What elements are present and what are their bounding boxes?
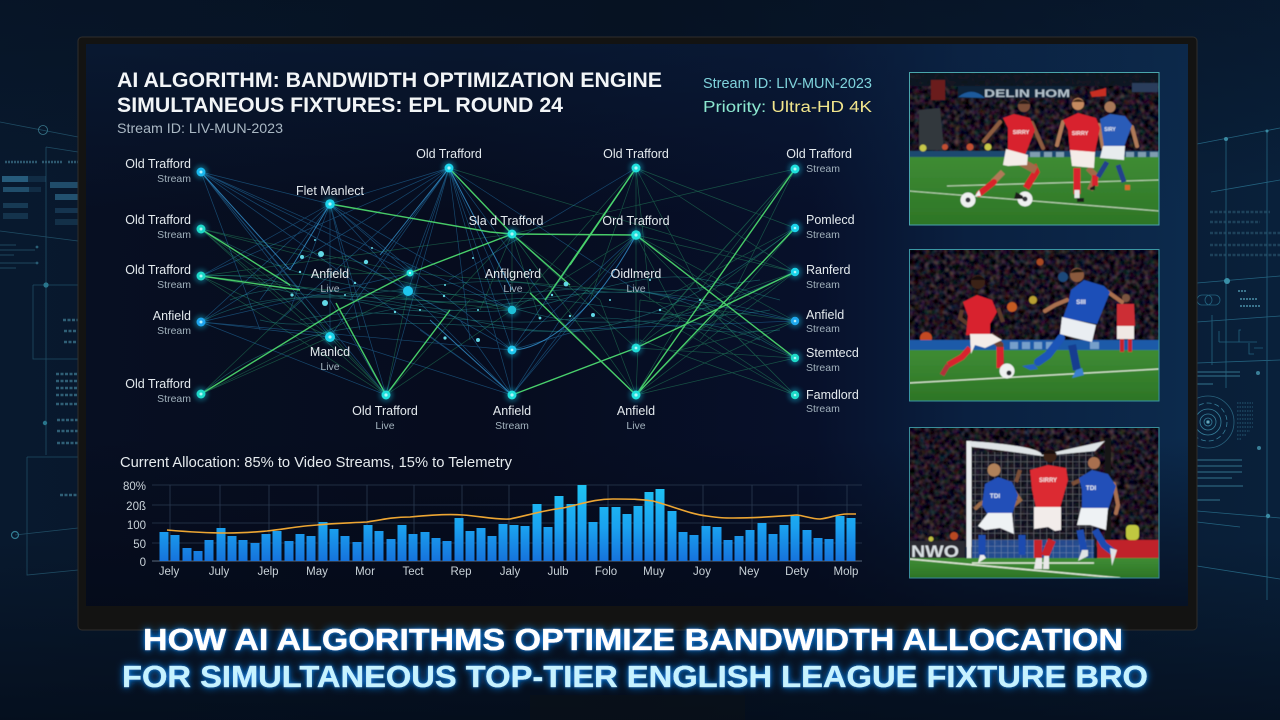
- x axis: Dety: [785, 566, 809, 578]
- x axis: Tect: [402, 566, 424, 578]
- node labels: Stream: [157, 173, 191, 185]
- particles: [290, 239, 701, 342]
- node labels: Stream: [157, 393, 191, 405]
- bars: [160, 485, 856, 561]
- node labels: Old Trafford: [416, 147, 482, 161]
- node labels: Stream: [157, 279, 191, 291]
- player red 1: [993, 172, 1003, 182]
- player blue: [1098, 162, 1107, 177]
- node labels: Live: [320, 283, 340, 295]
- node labels: Old Trafford: [125, 213, 191, 227]
- y axis: [123, 481, 146, 569]
- bottom headline: HOW AI ALGORITHMS OPTIMIZE BANDWIDTH ALLOCATION: [143, 622, 1123, 657]
- node labels: Pomlecd: [806, 213, 855, 227]
- node labels: Stream: [806, 279, 840, 291]
- match photo 3: TDI: [1086, 485, 1096, 492]
- node labels: Old Trafford: [125, 377, 191, 391]
- node labels: [125, 147, 859, 432]
- x axis: Julb: [547, 566, 569, 578]
- green mesh: [201, 168, 795, 395]
- balls: [960, 192, 976, 208]
- node labels: Live: [320, 361, 340, 373]
- node cores: [200, 166, 796, 397]
- match photo 1: SIRY: [1104, 127, 1116, 133]
- node labels: Anfield: [617, 404, 655, 418]
- match photo 1: SIRRY: [1013, 130, 1030, 136]
- y axis: 50: [133, 539, 146, 551]
- left HUD bars: [2, 176, 78, 225]
- node labels: Old Trafford: [125, 263, 191, 277]
- curved web: [201, 228, 795, 394]
- bottom headline: [122, 622, 1148, 694]
- photo 1 border: [910, 72, 1159, 225]
- match photo 2: SIII: [1076, 299, 1086, 306]
- bezel: [78, 37, 1197, 630]
- node labels: Stream: [157, 325, 191, 337]
- title block: [117, 69, 662, 136]
- blue player: [1038, 338, 1061, 362]
- match photo 3: TDI: [990, 493, 1000, 500]
- node labels: Live: [626, 283, 646, 295]
- node labels: Stream: [806, 323, 840, 335]
- x axis: Jely: [159, 566, 179, 578]
- goal: [972, 452, 1094, 542]
- network diagram: [125, 147, 859, 432]
- x axis: [159, 566, 858, 578]
- stand shadow: [530, 695, 745, 720]
- x axis: Jelp: [257, 566, 279, 578]
- screen: [86, 44, 1188, 606]
- node labels: Stream: [806, 229, 840, 241]
- x axis: Molp: [834, 566, 858, 578]
- title block: SIMULTANEOUS FIXTURES: EPL ROUND 24: [117, 94, 563, 117]
- title block: Stream ID: LIV-MUN-2023: [117, 120, 283, 136]
- nodes: [196, 164, 800, 400]
- red player: [1038, 540, 1052, 558]
- left blue player: [982, 535, 1022, 555]
- x axis: Joy: [693, 566, 711, 578]
- y axis: 100: [127, 520, 146, 532]
- node labels: Anfield: [153, 309, 191, 323]
- match photo 3: SIRRY: [1039, 478, 1057, 484]
- bar chart: [123, 481, 862, 578]
- node labels: Old Trafford: [125, 157, 191, 171]
- x axis: Ney: [739, 566, 759, 578]
- stream status: [703, 76, 873, 116]
- match photo 2: [909, 249, 1159, 401]
- node labels: Stream: [806, 362, 840, 374]
- bright blue links: [201, 168, 636, 395]
- allocation heading: Current Allocation: 85% to Video Streams, 15% to Telemetry: [120, 455, 513, 471]
- stream status: Stream ID: LIV-MUN-2023: [703, 76, 872, 92]
- y axis: 80%: [123, 481, 146, 493]
- node labels: Ord Trafford: [602, 214, 670, 228]
- node labels: Anfield: [493, 404, 531, 418]
- node labels: Old Trafford: [786, 147, 852, 161]
- node labels: Live: [503, 283, 523, 295]
- match photo 3: [909, 427, 1159, 578]
- red player: [948, 348, 970, 365]
- grid: [152, 485, 862, 561]
- node labels: Stemtecd: [806, 346, 859, 360]
- node labels: Manlcd: [310, 345, 350, 359]
- node labels: Stream: [806, 403, 840, 415]
- node labels: Stream: [806, 163, 840, 175]
- distant red player: [1122, 330, 1130, 352]
- stream status: Priority: Ultra-HD 4K: [703, 99, 873, 116]
- node labels: Anfield: [806, 308, 844, 322]
- player red 2: [1074, 168, 1080, 194]
- right blue player: [1080, 530, 1113, 552]
- photo 2 border: [910, 250, 1159, 401]
- x axis: Muy: [643, 566, 665, 578]
- match photo 1: [909, 72, 1159, 225]
- x axis: Folo: [595, 566, 617, 578]
- node labels: Live: [626, 420, 646, 432]
- node labels: Ranferd: [806, 263, 851, 277]
- node labels: Flet Manlect: [296, 184, 365, 198]
- left HUD decoration: [0, 122, 78, 575]
- bottom headline: FOR SIMULTANEOUS TOP-TIER ENGLISH LEAGUE FIXTURE BRO: [122, 659, 1148, 694]
- node labels: Sla d Trafford: [469, 214, 543, 228]
- node labels: Stream: [157, 229, 191, 241]
- trend line: [167, 499, 856, 533]
- x axis: Jaly: [500, 566, 520, 578]
- x axis: Mor: [355, 566, 375, 578]
- node halos: [194, 161, 802, 402]
- monitor: [78, 37, 1197, 630]
- match photo 3: NWO: [911, 542, 959, 561]
- node labels: Anfilgnerd: [485, 267, 541, 281]
- node labels: Anfield: [311, 267, 349, 281]
- photo 3 border: [910, 428, 1159, 578]
- match photo 1: DELIN HOM: [984, 88, 1070, 100]
- node labels: Stream: [495, 420, 529, 432]
- ball: [1000, 364, 1014, 378]
- match photo 1: SIRRY: [1072, 131, 1089, 137]
- blue mesh: [201, 168, 795, 395]
- node labels: Famdlord: [806, 388, 859, 402]
- node labels: Live: [375, 420, 395, 432]
- title block: AI ALGORITHM: BANDWIDTH OPTIMIZATION ENGINE: [117, 69, 662, 92]
- right HUD decoration: [1182, 128, 1280, 600]
- x axis: May: [306, 566, 328, 578]
- node labels: Old Trafford: [603, 147, 669, 161]
- y axis: 0: [140, 557, 146, 569]
- bright green links: [201, 168, 795, 395]
- x axis: July: [209, 566, 229, 578]
- node labels: Old Trafford: [352, 404, 418, 418]
- y axis: 20ß: [126, 501, 146, 513]
- x axis: Rep: [450, 566, 472, 578]
- node labels: Oidlmerd: [611, 267, 661, 281]
